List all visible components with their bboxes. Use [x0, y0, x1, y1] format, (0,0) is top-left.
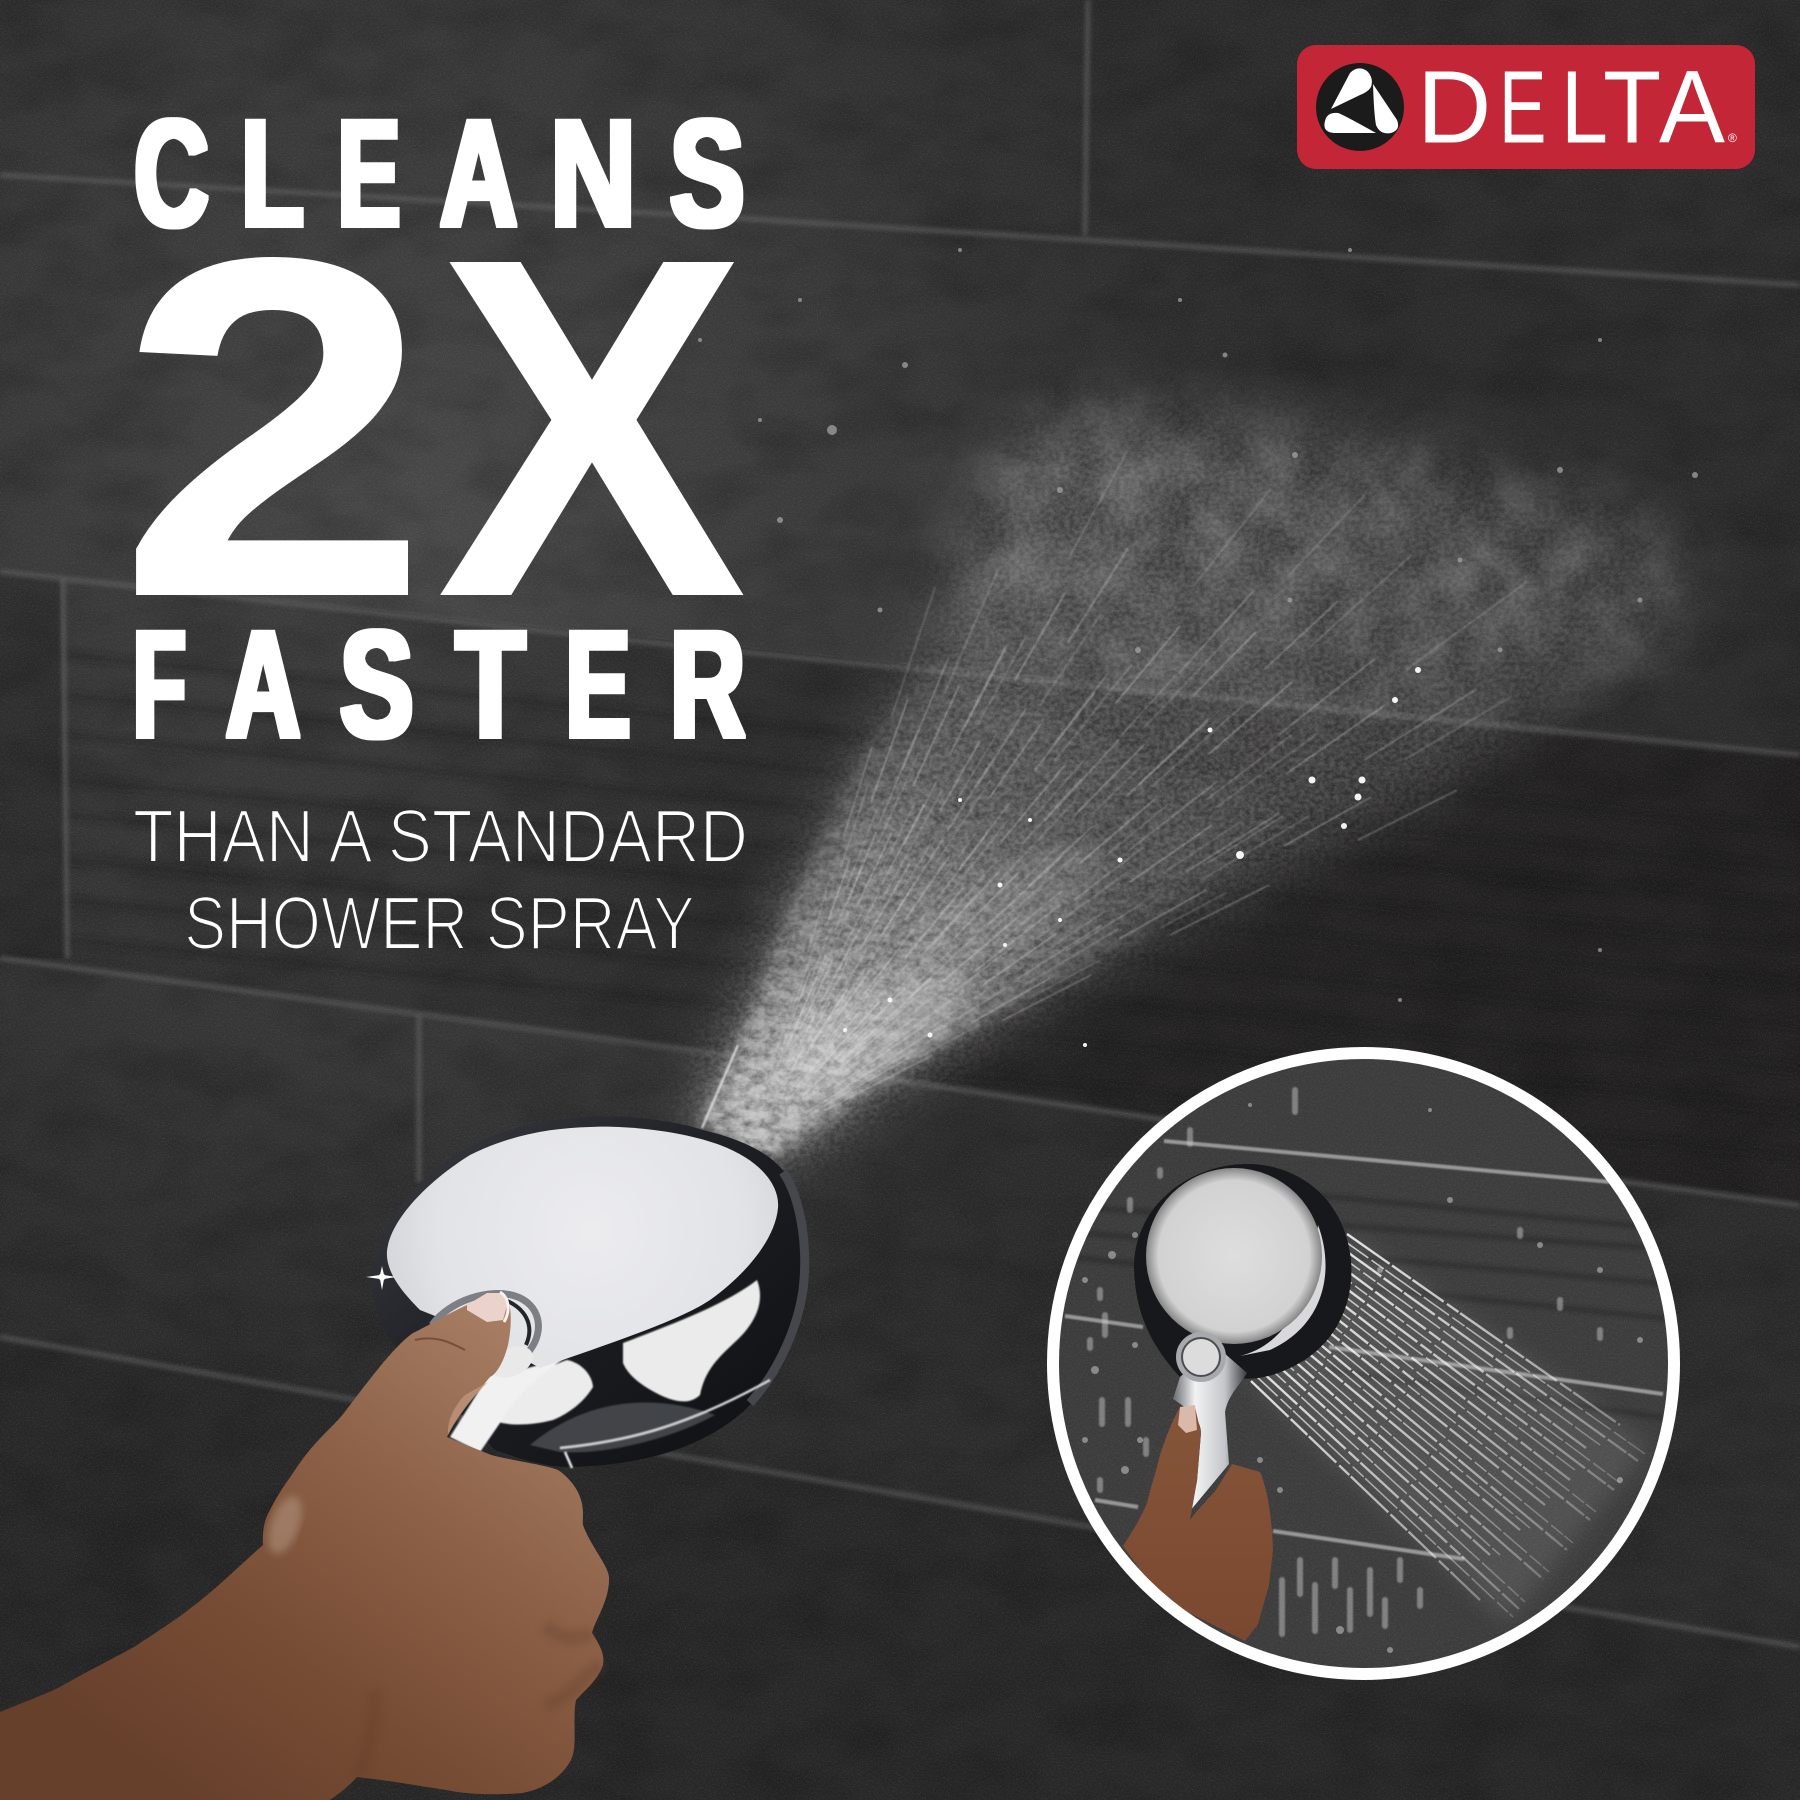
headline: CLEANS: [134, 87, 745, 259]
inset spray: [1251, 1234, 1650, 1624]
headline: 2X: 2: [116, 158, 431, 698]
headline: CLEANS: C: [134, 88, 209, 259]
headline: FASTER: S: [340, 600, 414, 770]
main shower head: [366, 1116, 807, 1468]
headline: FASTER: R: [670, 599, 745, 770]
thumb crease: [415, 1338, 465, 1350]
spray droplets: [843, 667, 1421, 1047]
inset hand: [1123, 1407, 1273, 1641]
logo wordmark: T: [1603, 50, 1661, 166]
logo wordmark: [1417, 50, 1737, 166]
head rim: [750, 1172, 805, 1403]
hand pressing button: [0, 1292, 609, 1800]
head body: [372, 1116, 807, 1467]
inset tile joints: [1065, 1141, 1663, 1559]
logo wordmark: D: [1417, 50, 1491, 165]
button ring: [432, 1294, 538, 1384]
headline: FASTER: F: [133, 600, 186, 770]
inset button: [1176, 1332, 1226, 1382]
headline: 2X: X: [436, 156, 750, 698]
inset white ring: [1053, 1053, 1674, 1674]
logo: Delta badge: [1297, 45, 1755, 169]
subheading text: THAN A STANDARD: [133, 794, 748, 878]
headline: CLEANS: L: [241, 87, 304, 259]
spray streaks: [702, 443, 1537, 1139]
headline: CLEANS: S: [670, 88, 745, 259]
headline: CLEANS: A: [440, 87, 517, 258]
inset water droplets: [1082, 1103, 1643, 1653]
icon: Delta triangle mark: [1316, 63, 1404, 151]
headline: CLEANS: E: [338, 87, 400, 259]
logo wordmark: A: [1659, 51, 1726, 165]
knuckle shading: [357, 1625, 603, 1777]
thumb nail: [467, 1293, 508, 1322]
headline: FASTER: E: [566, 600, 631, 770]
icon: sparkle on chrome: [366, 1266, 396, 1290]
logo wordmark: E: [1499, 50, 1546, 165]
headline: FASTER: A: [226, 599, 300, 770]
subheading text: [133, 794, 748, 965]
inset shower head: [1134, 1164, 1351, 1511]
logo wordmark: L: [1561, 50, 1608, 165]
headline: FASTER: [133, 599, 745, 770]
wrist highlight: [262, 1492, 308, 1558]
logo wordmark: ®: [1728, 131, 1737, 145]
subheading text: SHOWER SPRAY: [184, 881, 695, 965]
chrome reflections under head: [450, 1280, 770, 1468]
inset photo: handheld shower with spray: [1050, 1050, 1680, 1680]
headline: 2X: [116, 156, 750, 698]
inset background: [1050, 1050, 1680, 1680]
inset water drips: [1090, 1090, 1600, 1634]
inset nail: [1178, 1405, 1197, 1433]
headline: FASTER: T: [456, 599, 525, 770]
water spray fan from main shower head: [698, 248, 1698, 1160]
inset handle: [1173, 1345, 1247, 1511]
head face: [387, 1127, 778, 1368]
headline: CLEANS: N: [550, 89, 636, 259]
